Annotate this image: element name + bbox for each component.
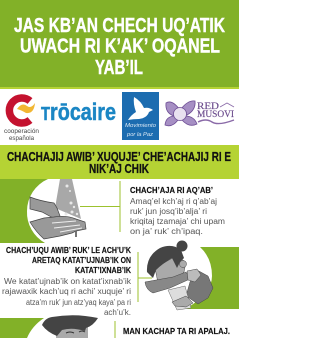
logo: Movimiento por la Paz: Movimiento <box>125 123 156 129</box>
panel: coughing person illustration <box>138 240 239 310</box>
text block: cover mouth: rajawaxik kach’uq ri achi’ xuquje’ ri <box>2 287 131 296</box>
text block: cover mouth <box>2 246 132 317</box>
connector line <box>114 321 116 338</box>
logo: cooperación española: cooperación <box>4 129 39 135</box>
title: YAB’IL <box>95 57 143 79</box>
text block: cover mouth: atza’m ruk’ jun atz’yaq kaya’ pa ri <box>26 298 131 307</box>
icon: water stream <box>55 179 81 219</box>
text block: cover mouth: KATAT’IXNAB’IK <box>75 266 131 275</box>
text block: cover mouth: ARETAQ KATAT’UJNAB’IK ON <box>32 256 131 265</box>
text block: do not spit: MAN KACHAP TA RI APALAJ. <box>123 326 230 336</box>
connector line <box>138 252 152 302</box>
icon: butterfly <box>165 101 197 126</box>
text block: wash hands: on ja’ ruk’ ch’ipaq. <box>130 227 203 236</box>
panel: bottom person illustration <box>0 315 115 338</box>
text block: wash hands: ruk’ jun josq’ib’alja’ ri <box>130 207 207 216</box>
text block: cover mouth: We katat’ujnab’ik on katat’ixnab’ik <box>4 277 132 286</box>
logo: Movimiento por la Paz <box>122 92 159 140</box>
text block: cover mouth: CHACH’UQU AWIB’ RUK’ LE ACH’U’K <box>6 246 131 255</box>
connector line <box>80 181 120 232</box>
logo: cooperación española: española <box>9 136 35 142</box>
header panel <box>0 0 239 89</box>
text block: wash hands <box>130 186 225 236</box>
logo: Red Musovi <box>165 101 234 126</box>
logo: Movimiento por la Paz: por la Paz <box>126 132 153 138</box>
icon: coughing person <box>145 240 213 310</box>
panel: hand washing illustration <box>0 179 120 243</box>
heading band: NIK’AJ CHIK <box>89 162 149 176</box>
text block: wash hands: kriqitaj tzamaja’ chi upam <box>130 217 225 226</box>
infographic page <box>0 0 239 338</box>
icon: person with swept hair <box>42 315 98 338</box>
logo: cooperación española <box>4 98 39 142</box>
icon: washing hands <box>30 197 86 239</box>
text block: wash hands: CHACH’AJA RI AQ’AB’ <box>130 186 213 195</box>
title <box>14 15 225 79</box>
text block: wash hands: Amaq’el kch’aj ri q’ab’aj <box>130 197 217 206</box>
heading band <box>0 145 239 179</box>
logo: Red Musovi: MUSOVI <box>197 109 234 119</box>
logo: Red Musovi: RED <box>197 101 220 111</box>
logo: Trócaire: Trōcaire <box>41 99 116 126</box>
text block: cover mouth: ach’u’k. <box>104 308 131 317</box>
